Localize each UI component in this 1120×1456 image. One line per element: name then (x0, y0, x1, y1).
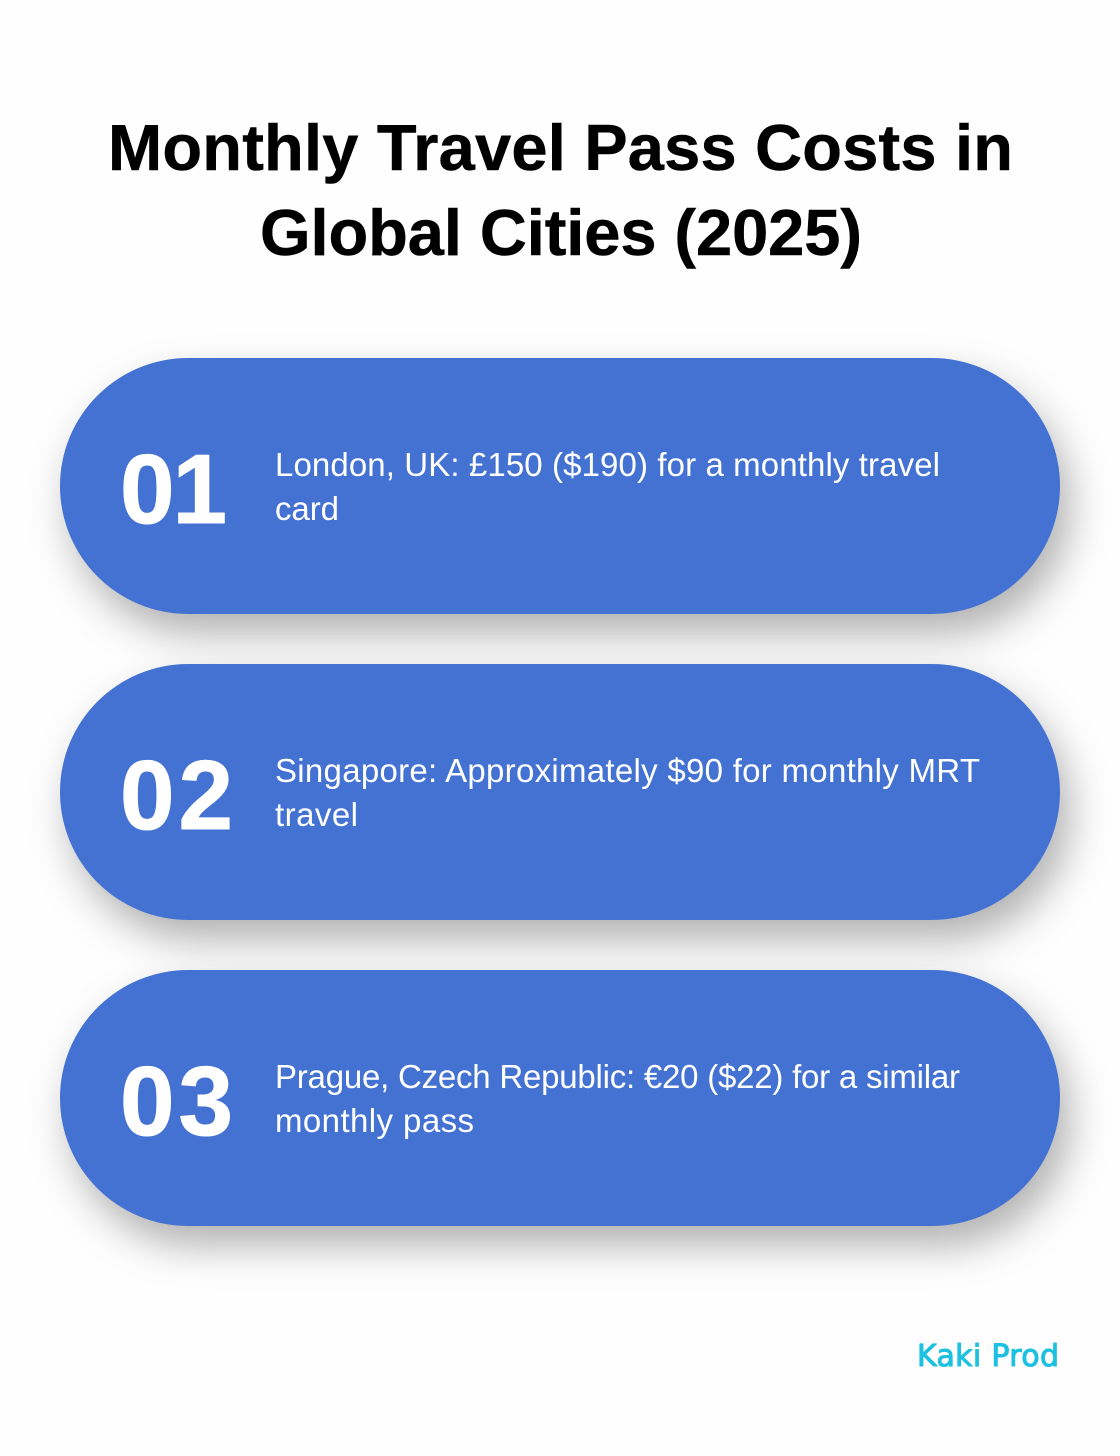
logo: Kaki Prod: Kaki Prod (917, 1339, 1059, 1374)
pill background (60, 664, 1060, 920)
text: London: card (275, 490, 339, 527)
pill background (60, 358, 1060, 614)
title: Global Cities (2025) (260, 196, 862, 269)
number 03: 03 (120, 1046, 233, 1156)
number 02: 02 (120, 740, 233, 850)
text: Prague (275, 1058, 960, 1139)
text: Singapore: Singapore: Approximately $90 for monthly MRT (275, 752, 980, 789)
text: London (275, 446, 940, 527)
text: Prague: Prague, Czech Republic: €20 ($22) for a similar (275, 1058, 960, 1095)
title (108, 111, 1013, 269)
text: Singapore: travel (275, 796, 358, 833)
text: London: London, UK: £150 ($190) for a monthly travel (275, 446, 940, 483)
panel: Prague (60, 970, 1060, 1226)
number 01: 01 (120, 434, 227, 544)
text: Prague: monthly pass (275, 1102, 474, 1139)
text: Singapore (275, 752, 980, 833)
panel: London (60, 358, 1060, 614)
panel: Singapore (60, 664, 1060, 920)
pill background (60, 970, 1060, 1226)
title: Monthly Travel Pass Costs in (108, 111, 1013, 184)
